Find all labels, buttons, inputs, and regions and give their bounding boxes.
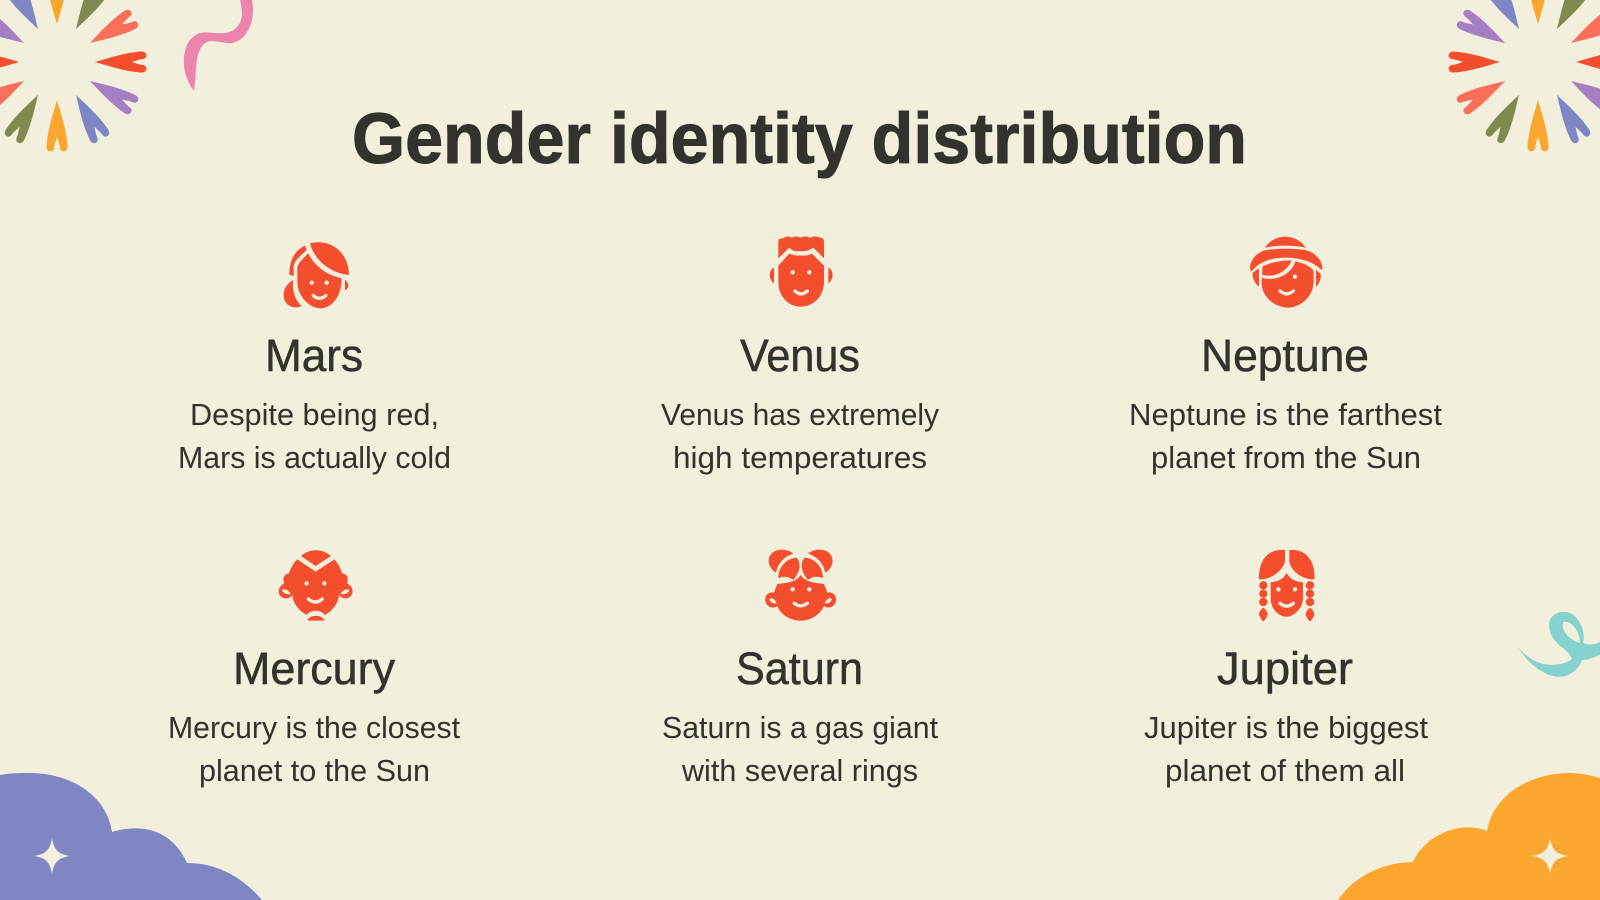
icon: Mercury face bbox=[279, 550, 353, 621]
icon: Venus face bbox=[770, 236, 833, 307]
starburst: top right bbox=[1449, 0, 1600, 151]
icon: Jupiter face bbox=[1259, 550, 1314, 622]
text: Mercury description bbox=[168, 710, 460, 788]
text: Neptune description: Neptune is the farthest bbox=[1129, 397, 1442, 432]
icon: sparkle right bbox=[1532, 838, 1568, 874]
heading: Venus: Venus bbox=[740, 330, 860, 381]
text: Saturn description bbox=[662, 710, 938, 788]
text: Mars description: Despite being red, bbox=[190, 397, 439, 432]
text: Venus description: high temperatures bbox=[673, 440, 927, 475]
heading: Jupiter: Jupiter bbox=[1217, 643, 1353, 694]
text: Jupiter description bbox=[1144, 710, 1428, 788]
cloud: bottom right bbox=[1338, 773, 1600, 900]
panel: Mercury bbox=[168, 550, 460, 788]
icon: sparkle left bbox=[34, 838, 70, 874]
heading: Mercury: Mercury bbox=[233, 643, 395, 694]
text: Venus description bbox=[661, 397, 939, 475]
heading: Saturn: Saturn bbox=[736, 643, 863, 694]
text: Mars description bbox=[178, 397, 451, 475]
cloud: bottom left bbox=[0, 773, 262, 900]
title: Gender identity distribution bbox=[352, 100, 1247, 179]
text: Neptune description bbox=[1129, 397, 1442, 475]
panel: Saturn bbox=[662, 550, 938, 788]
panel: Mars bbox=[178, 242, 451, 475]
text: Jupiter description: planet of them all bbox=[1165, 753, 1405, 788]
panel: Neptune bbox=[1129, 237, 1442, 475]
panel: Venus bbox=[661, 236, 939, 475]
text: Mercury description: Mercury is the closest bbox=[168, 710, 460, 745]
text: Venus description: Venus has extremely bbox=[661, 397, 939, 432]
heading: Mars: Mars bbox=[265, 330, 363, 381]
icon: Saturn face bbox=[765, 550, 836, 621]
panel: Jupiter bbox=[1144, 550, 1428, 788]
heading: Neptune: Neptune bbox=[1201, 330, 1369, 381]
pink ribbon bbox=[184, 0, 253, 91]
icon: Neptune face bbox=[1250, 237, 1322, 308]
text: Mercury description: planet to the Sun bbox=[199, 753, 430, 788]
text: Saturn description: with several rings bbox=[681, 753, 918, 788]
text: Mars description: Mars is actually cold bbox=[178, 440, 451, 475]
text: Jupiter description: Jupiter is the biggest bbox=[1144, 710, 1428, 745]
teal ribbon bbox=[1518, 612, 1600, 677]
starburst: top left bbox=[0, 0, 146, 151]
text: Saturn description: Saturn is a gas giant bbox=[662, 710, 938, 745]
icon: Mars face bbox=[284, 242, 349, 308]
text: Neptune description: planet from the Sun bbox=[1151, 440, 1421, 475]
